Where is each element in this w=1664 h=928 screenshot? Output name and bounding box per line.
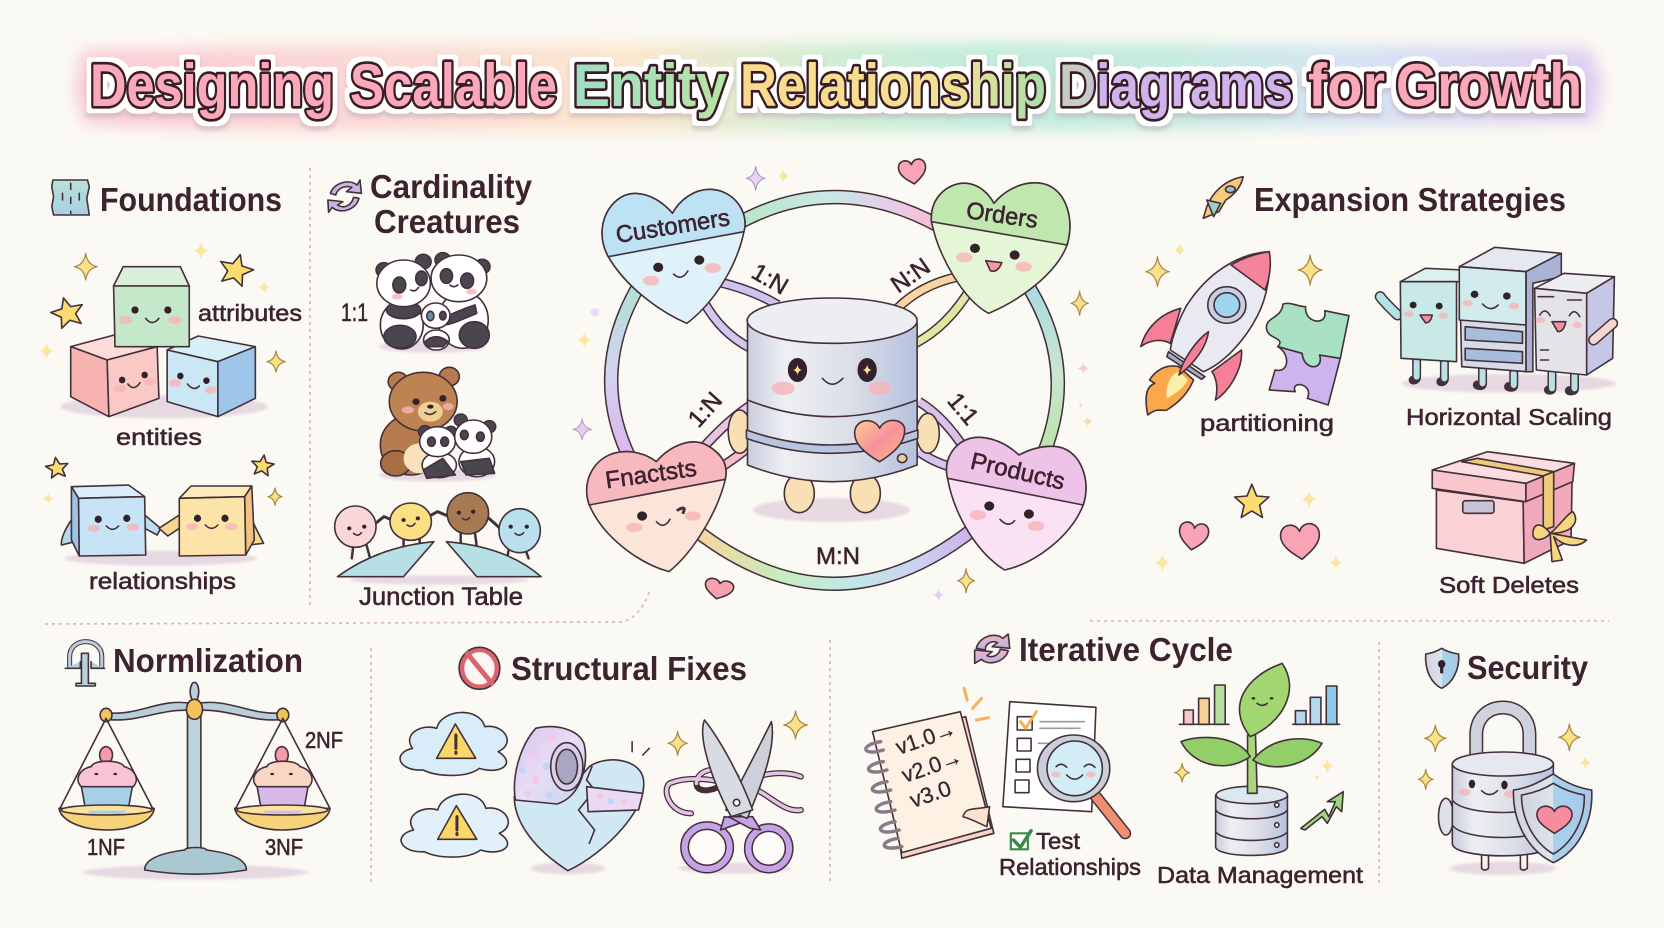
note text: v3.0: v3.0 (906, 775, 954, 813)
icon: small rocket (1203, 177, 1243, 218)
panel: structural fixes (400, 647, 807, 874)
icon: checklist (1003, 702, 1125, 833)
cardinality label: right 1:1: 1:1 (942, 388, 984, 431)
icon: padlock database (1438, 707, 1556, 875)
title text: Entity (573, 52, 728, 119)
heading: expansion strategies: Expansion Strategies (1254, 181, 1566, 218)
icon: heart shield (1513, 774, 1592, 863)
note text: v1.0: v1.0→ (892, 716, 959, 760)
icon: scissors cutting rope (667, 720, 801, 874)
heading: cardinality creatures: Creatures (374, 203, 520, 240)
icon: arch (65, 642, 104, 686)
label: attributes: attributes (198, 300, 302, 326)
icon: sparkles (668, 711, 807, 755)
panel: foundations (39, 180, 302, 594)
illustration: cardinality (328, 180, 541, 585)
panel: expansion strategies (1141, 177, 1616, 598)
heart: products (946, 437, 1086, 570)
icon: check mark (1011, 831, 1031, 849)
title text (90, 52, 1582, 119)
label: test: Test (1036, 828, 1080, 854)
title text: Growth (1396, 52, 1582, 119)
icon: stars and sparkles (39, 242, 285, 505)
icon: rocket (1141, 252, 1270, 415)
label: horizontal scaling: Horizontal Scaling (1406, 404, 1612, 430)
illustration: structural fixes (400, 647, 807, 874)
icon: happy servers (1380, 247, 1616, 393)
icon: prohibited sign (459, 647, 500, 689)
icon: broken heart with tape (514, 727, 649, 874)
icon: creatures on junction bridge (335, 493, 541, 585)
label: junction table: Junction Table (359, 583, 523, 611)
title text: Relationship (740, 52, 1046, 119)
label: 3NF: 3NF (265, 834, 303, 860)
heart: customers (602, 189, 745, 323)
label: relationships: relationships (89, 568, 236, 594)
icon: cute database cylinder (728, 298, 939, 522)
title banner (74, 42, 1603, 132)
icon: sparkles (1418, 724, 1591, 789)
heart: orders (931, 183, 1070, 313)
label: 1NF: 1NF (87, 834, 125, 860)
panel: security (1418, 648, 1592, 875)
icon: cycle arrows (328, 180, 361, 212)
decorations: hearts and sparkles (573, 158, 1093, 602)
icon: pandas 1:1 (376, 253, 490, 353)
title text: Designing (90, 52, 334, 119)
label: partitioning: partitioning (1200, 410, 1334, 436)
heading: foundations: Foundations (100, 181, 282, 218)
icon: cubes holding hands (61, 485, 264, 566)
heading: cardinality creatures: Cardinality (370, 168, 533, 205)
icon: scale (60, 682, 330, 880)
icon: gift box (1432, 452, 1587, 563)
section dividers (45, 168, 1609, 885)
icon: stacked smiling cubes (61, 267, 268, 418)
title text: Diagrams (1059, 52, 1293, 119)
illustration: central ring and hearts (573, 158, 1093, 602)
heading: iterative cycle: Iterative Cycle (1019, 631, 1233, 668)
heading: cardinality creatures (370, 168, 533, 240)
icon: spiral notebook (866, 688, 994, 858)
icon: cupcake right (235, 747, 330, 830)
icon: growing plant on database (1175, 663, 1343, 855)
heart label: customers: Customers (614, 204, 732, 249)
illustration: expansion (1141, 177, 1616, 572)
panel: central database hub (573, 158, 1093, 602)
title text: Scalable (350, 52, 557, 119)
heading: structural fixes: Structural Fixes (511, 650, 747, 687)
icon: cycle arrows (975, 634, 1010, 663)
icon: stars and hearts (1146, 243, 1342, 572)
illustration: security (1418, 648, 1592, 875)
label: entities: entities (116, 424, 202, 450)
icon: bear with panda cubs 1:N (379, 367, 496, 482)
cardinality label: top-right N:N: N:N (886, 253, 935, 299)
note text: v2.0: v2.0→ (898, 744, 965, 788)
panel: cardinality creatures (328, 168, 541, 611)
title text: for (1308, 52, 1385, 119)
heart: fruits (587, 442, 726, 572)
heart label: garbled fruits: Fnactsts (604, 455, 698, 494)
icon: small shield (1426, 648, 1459, 688)
illustration: balance scale (59, 642, 330, 880)
label: relationships: Relationships (999, 854, 1141, 880)
icon: table (52, 180, 89, 215)
cardinality label: left 1:N: 1:N (683, 387, 728, 433)
panel: iterative cycle (866, 631, 1363, 888)
heart label: orders: Orders (965, 197, 1040, 234)
label: 2NF: 2NF (305, 727, 343, 753)
label: soft deletes: Soft Deletes (1439, 572, 1579, 598)
illustration: iterative cycle (866, 634, 1343, 858)
cardinality label: top-left 1:N: 1:N (747, 258, 793, 301)
cardinality label: bottom M:N: M:N (816, 543, 860, 570)
heading: normlization: Normlization (113, 642, 303, 679)
watercolor rainbow band (74, 42, 1603, 132)
heading: security: Security (1467, 649, 1589, 686)
label: data management: Data Management (1157, 862, 1363, 888)
illustration: foundations (39, 180, 285, 566)
icon: puzzle pieces (1266, 303, 1349, 405)
icon: warning clouds (400, 712, 508, 857)
icon: cupcake left (59, 747, 154, 830)
heart label: products: Products (968, 448, 1067, 496)
panel: normalization (59, 642, 343, 880)
label: 1:1: 1:1 (341, 299, 368, 327)
ring connectors (611, 197, 1058, 584)
